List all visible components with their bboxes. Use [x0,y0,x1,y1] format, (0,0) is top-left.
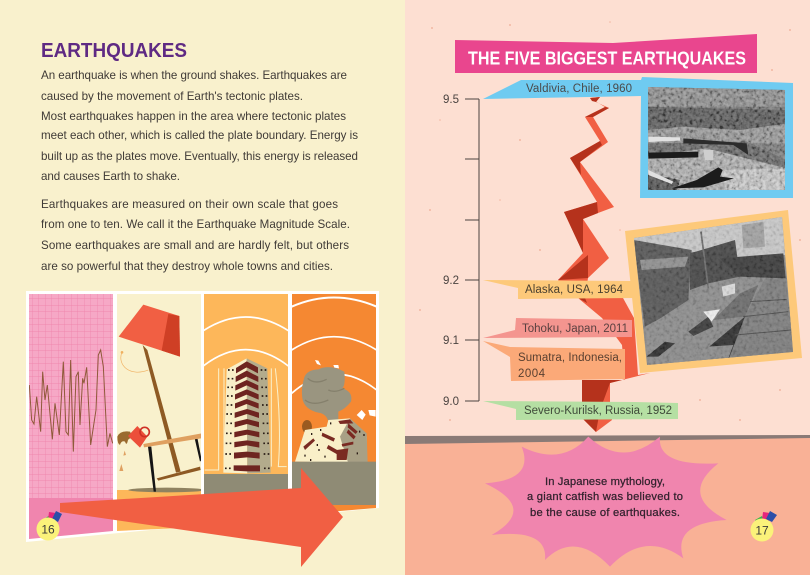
callout: Alaska: Alaska, USA, 1964 [525,284,624,296]
right page lower band [405,437,810,575]
seismograph wave [29,350,113,452]
page number 16 [36,518,60,540]
callout: Tohoku: Tohoku, Japan, 2011 [522,323,628,335]
left page background [0,0,405,575]
photo: Valdivia rubble with blue frame and callout: Valdivia, Chile, 1960 [526,83,632,95]
callout: Sumatra: 2004 [518,368,546,380]
starburst fact [485,437,727,567]
panel: falling lamp and table [117,294,205,539]
chart: magnitude axis: 9.1 [443,335,459,347]
callout: Sumatra [483,341,625,381]
starburst fact: In Japanese mythology, [545,476,665,488]
text block: magnitude paragraph: Some earthquakes are small and are hardly felt, but others [41,239,349,252]
text block: magnitude paragraph: Earthquakes are measured on their own scale that goes [41,198,338,211]
chart: magnitude axis: 9.2 [443,275,459,287]
text block: intro paragraph: and causes Earth to shake. [41,170,180,183]
photo: Valdivia rubble with blue frame and callout [483,77,793,198]
starburst fact: a giant catfish was believed to [527,491,683,503]
text block: intro paragraph: caused by the movement of Earth's tectonic plates. [41,90,303,103]
text block: intro paragraph: Most earthquakes happen in the area where tectonic plates [41,110,346,123]
banner: five biggest earthquakes: THE FIVE BIGGEST EARTHQUAKES [468,48,746,68]
icon: page tabs [44,511,62,525]
text block: intro paragraph: meet each other, which is called the plate boundary. Energy is [41,129,358,142]
text block: intro paragraph [41,69,358,183]
callout: Tohoku [483,318,632,338]
banner: five biggest earthquakes [455,34,757,73]
right page background [405,0,810,442]
panel: collapsing building [292,294,376,512]
panel: seismograph [29,294,113,543]
chart: magnitude axis [443,94,479,408]
text block: magnitude paragraph [41,198,350,273]
page number 17 [750,518,774,542]
page number 17: 17 [755,524,769,538]
text block: magnitude paragraph: from one to ten. We call it the Earthquake Magnitude Scale. [41,218,350,231]
illustration frame [26,291,379,542]
background speckles [419,21,801,421]
crack graphic [558,97,650,432]
callout: Alaska [483,280,633,299]
text block: intro paragraph: built up as the plates move. Eventually, this energy is released [41,150,358,163]
arrow: large red [60,468,343,567]
chart: magnitude axis: 9.5 [443,94,459,106]
text block: magnitude paragraph: are so powerful that they destroy whole towns and cities. [41,260,333,273]
title: Earthquakes: EARTHQUAKES [41,40,187,62]
starburst fact: be the cause of earthquakes. [530,507,680,519]
callout: Severo-Kurilsk: Severo-Kurilsk, Russia, 1952 [524,405,672,417]
panel: standing building [204,294,288,494]
page number 16: 16 [41,522,55,536]
callout: Severo-Kurilsk [483,401,678,420]
ground line [405,435,810,444]
callout: Sumatra: Sumatra, Indonesia, [518,352,622,364]
icon: page tabs right [755,511,777,525]
text block: intro paragraph: An earthquake is when the ground shakes. Earthquakes are [41,69,347,82]
photo: Alaska street with yellow frame [625,210,802,373]
chart: magnitude axis: 9.0 [443,396,459,408]
